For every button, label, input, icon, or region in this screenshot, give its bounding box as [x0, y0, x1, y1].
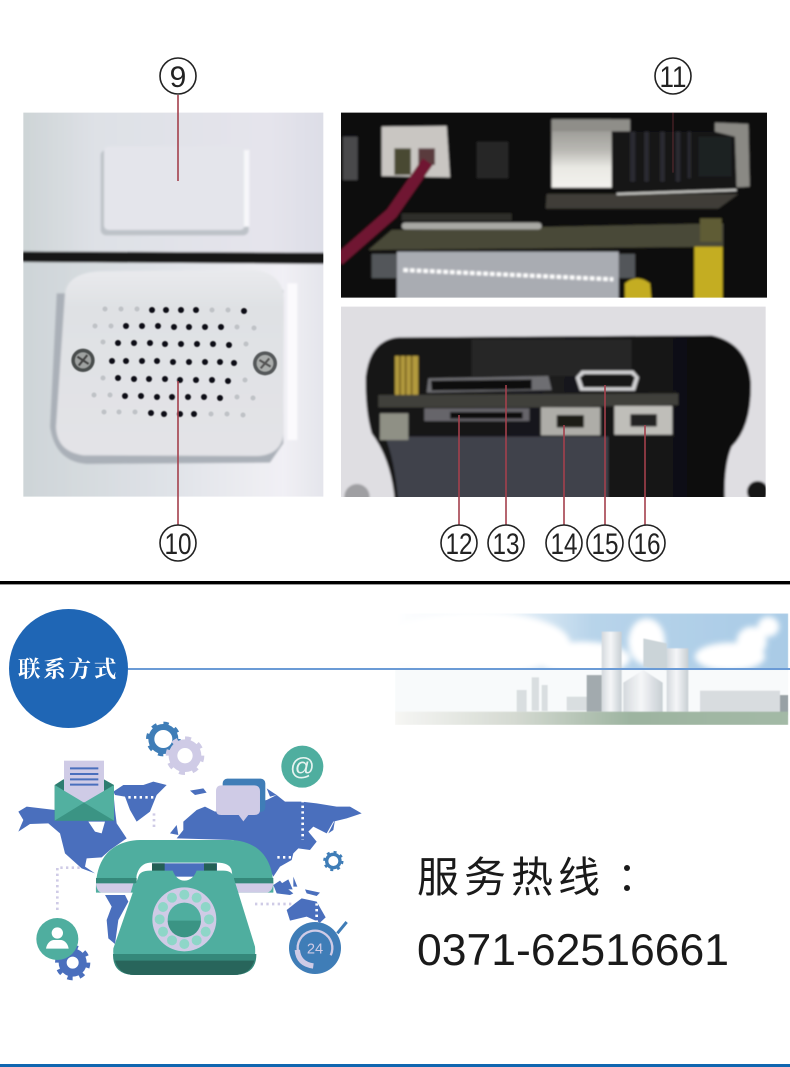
contact illustration: [18, 723, 362, 978]
circuit board strip: [378, 393, 678, 407]
towers and silos: [587, 632, 788, 715]
callout 9: [160, 58, 196, 94]
icon: at sign: [281, 746, 323, 788]
icon: telephone: [96, 840, 273, 975]
metal shield block: [546, 119, 738, 209]
icon: speech bubble: [216, 779, 265, 821]
label plate: [101, 147, 249, 235]
right screw: [253, 351, 277, 375]
callout 15: 15: [592, 528, 618, 561]
callout 14: 14: [550, 528, 578, 561]
red wire: [338, 162, 428, 260]
callout 13: 13: [492, 528, 520, 561]
photo: label plate and speaker panel: [17, 107, 330, 503]
ground strip: [395, 712, 788, 725]
clouds: [434, 614, 782, 668]
card slot bottom: [424, 408, 529, 421]
leader line 11: [672, 112, 674, 173]
heat sink: [612, 123, 750, 194]
icon: 24 hour service: [289, 922, 347, 974]
card slot top: [427, 376, 552, 393]
icon: at sign: @: [290, 754, 315, 781]
hotline label: 服务热线: [417, 854, 605, 901]
corner details: [343, 483, 370, 497]
photo: port panel: [341, 306, 766, 497]
black seam band: [17, 251, 330, 264]
dotted connectors: [57, 797, 317, 922]
callout 11: 11: [660, 61, 686, 94]
distant plant: [517, 677, 590, 712]
icon: gears: [148, 723, 202, 773]
hotline number: 0371-62516661: [417, 926, 729, 975]
right switch: [614, 406, 672, 435]
icon: envelope: [55, 761, 114, 821]
badge: contact: 联系方式: [18, 657, 119, 682]
white wire connector: [382, 126, 450, 177]
factory banner: [383, 612, 788, 725]
hotline colon: [624, 865, 630, 891]
left screw: [71, 349, 95, 372]
callout 9: 9: [170, 61, 186, 94]
callout 12: 12: [446, 528, 472, 561]
gold coil: [395, 356, 418, 395]
icon: 24 hour service: 24: [307, 941, 323, 957]
photo: internal connector with heat sink: [341, 112, 767, 298]
badge: contact: [9, 609, 128, 728]
dark cavity: [366, 335, 751, 503]
icon: small gear: [324, 852, 342, 870]
section rule: [128, 668, 790, 670]
left edge reflections: [343, 137, 358, 180]
gold standoffs: [625, 218, 723, 303]
callout 10: 10: [164, 528, 192, 561]
micro USB port: [576, 371, 639, 391]
icon: user with gear: [36, 918, 88, 978]
speaker cover: [50, 270, 297, 464]
speaker holes: [91, 306, 256, 417]
callout 16: 16: [634, 528, 660, 561]
left switch: [541, 407, 600, 435]
circuit board: [368, 213, 723, 250]
silver connector: [372, 252, 635, 302]
small white connector: [380, 413, 408, 440]
leader lines: [178, 95, 645, 525]
world map: [18, 782, 362, 944]
